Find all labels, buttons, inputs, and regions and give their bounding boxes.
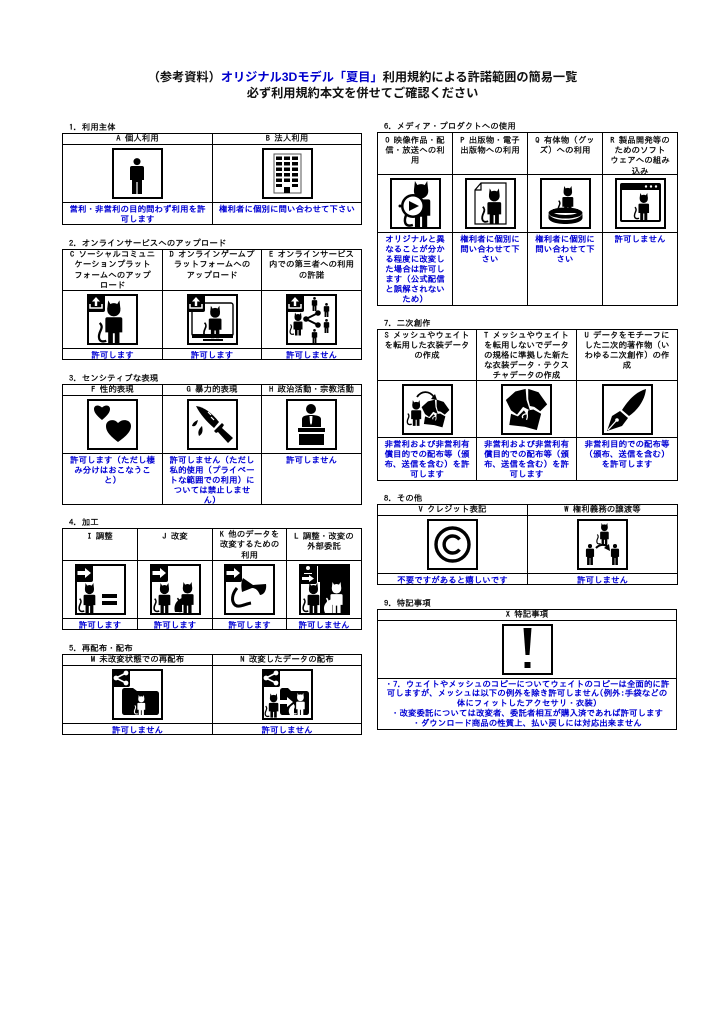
header: S: の作成 <box>414 352 440 360</box>
result: T: 布、送信を含む）を許 <box>484 461 569 469</box>
header: R: ウェアへの組み <box>610 157 670 165</box>
result: O: オリジナルと異 <box>385 236 445 244</box>
result: A: 営利・非営利の目的問わず利用を許 <box>70 206 206 214</box>
header: D: アップロード <box>186 272 238 280</box>
result: S: 償目的での配布等（頒 <box>384 451 470 459</box>
icon: outsource <box>287 561 362 619</box>
table <box>62 654 362 735</box>
result: K <box>213 619 287 630</box>
subtitle: 必ず利用規約本文を併せてご確認ください <box>247 86 478 100</box>
result: G: 私的使用（プライベー <box>170 467 254 475</box>
result: Q: 問い合わせて下 <box>535 246 595 254</box>
result: M <box>63 724 213 735</box>
header: T: の規格に準拠した新た <box>484 352 569 360</box>
result: O <box>378 233 453 306</box>
header: D: ラットフォームへの <box>174 261 250 269</box>
header: A: A 個人利用 <box>116 135 159 143</box>
result: P: さい <box>482 256 498 264</box>
heading: 1. 利用主体 <box>69 124 116 132</box>
header: Q <box>528 133 603 175</box>
header: Q: ズ）への利用 <box>540 147 590 155</box>
result: P: 権利者に個別に <box>460 236 520 244</box>
panel: 7. 二次創作 <box>377 318 678 481</box>
header: S: を転用した衣装データ <box>384 342 470 350</box>
result: B: 権利者に個別に問い合わせて下さい <box>219 206 355 214</box>
panel: 6. メディア・プロダクトへの使用 <box>377 122 678 306</box>
header: N <box>213 655 362 666</box>
heading: 6. メディア・プロダクトへの使用 <box>384 123 516 131</box>
result: F: み分けはおこなうこ <box>74 467 151 475</box>
result: O: ため） <box>402 296 428 304</box>
result: H <box>262 454 362 505</box>
header: C: ロード <box>100 282 125 290</box>
result: L: 許可しません <box>298 622 350 630</box>
header: L: 外部委託 <box>307 543 341 551</box>
header: M: M 未改変状態での再配布 <box>91 656 184 664</box>
panel: 8. その他 <box>377 494 678 585</box>
header: I <box>63 529 138 561</box>
icon: redistribute <box>63 666 213 724</box>
header: N: N 改変したデータの配布 <box>240 656 334 664</box>
header: O: 用 <box>411 157 419 165</box>
header: E: E オンラインサービス <box>269 251 354 259</box>
result: G: ん） <box>204 497 220 505</box>
result: F: 許可します（ただし棲 <box>70 456 155 464</box>
table <box>62 133 362 225</box>
result: I: 許可します <box>79 622 121 630</box>
icon: distribute modified <box>213 666 362 724</box>
result: W <box>528 574 678 585</box>
result: U: を許可します <box>602 461 652 469</box>
icon: knife <box>163 396 262 454</box>
table <box>62 249 362 360</box>
result: O: と誤解されない <box>385 286 445 294</box>
icon: pen nib <box>577 381 678 438</box>
header: E: の許諾 <box>299 272 324 280</box>
header: S: S メッシュやウェイト <box>384 332 470 340</box>
result: G: トな範囲での利用）に <box>170 477 254 485</box>
heading: 4. 加工 <box>69 518 99 526</box>
header: W: W 権利義務の譲渡等 <box>564 506 641 514</box>
table <box>377 329 678 481</box>
result: E: 許可しません <box>286 352 337 360</box>
header: U: U データをモチーフに <box>584 332 670 340</box>
icon: person <box>63 145 213 203</box>
result: T: 非営利および非営利有 <box>484 440 569 448</box>
icon: physical goods <box>528 175 603 233</box>
heading: 7. 二次創作 <box>384 320 431 328</box>
header: F: F 性的表現 <box>91 386 134 394</box>
header: K: 改変するための <box>220 541 279 549</box>
header: I: I 調整 <box>87 533 113 541</box>
header: T: を転用しないでデータ <box>484 342 569 350</box>
header: X: X 特記事項 <box>506 611 548 619</box>
result: C: 許可します <box>91 352 134 360</box>
header: B: B 法人利用 <box>266 135 308 143</box>
result: M: 許可しません <box>112 726 163 734</box>
header: V: V クレジット表記 <box>418 506 486 514</box>
header: R <box>603 133 678 175</box>
icon: speaker at podium <box>262 396 362 454</box>
header: T: T メッシュやウェイト <box>484 332 569 340</box>
header: U: 成 <box>623 362 631 370</box>
result: I <box>63 619 138 630</box>
header: G: G 暴力的表現 <box>186 386 238 394</box>
header: D: D オンラインゲームプ <box>170 251 254 259</box>
result: J <box>138 619 213 630</box>
result: notes: 体にフィットしたアクセサリ・衣装) <box>457 700 597 708</box>
header: O <box>378 133 453 175</box>
result: N: 許可しません <box>262 726 312 734</box>
header: U: した二次的著作物（い <box>584 342 670 350</box>
icon: third-party licensing <box>262 291 362 349</box>
panel: 5. 再配布・配布 <box>62 644 362 735</box>
result: O: た場合は許可し <box>385 266 445 274</box>
result: H: 許可しません <box>286 456 337 464</box>
header: L <box>287 529 362 561</box>
header: R: 込み <box>632 168 648 176</box>
result: U: （頒布、送信を含む） <box>584 451 670 459</box>
header: O: O 映像作品・配 <box>385 136 445 144</box>
result: S: 可します <box>410 471 444 479</box>
panel: 2. オンラインサービスへのアップロード <box>62 238 362 360</box>
result: N <box>213 724 362 735</box>
header: K <box>213 529 287 561</box>
icon: bow and tail parts <box>213 561 287 619</box>
icon: adjust <box>63 561 138 619</box>
result: U: 非営利目的での配布等 <box>584 440 670 448</box>
table <box>62 528 362 630</box>
result: J: 許可します <box>154 622 196 630</box>
result: F <box>63 454 163 505</box>
result: U <box>577 438 678 481</box>
result: G <box>163 454 262 505</box>
header: J: J 改変 <box>162 533 188 541</box>
result: A: 可します <box>120 216 154 224</box>
result: D: 許可します <box>191 352 233 360</box>
icon: rights transfer <box>528 516 678 574</box>
table <box>62 384 362 505</box>
header: S <box>378 330 477 381</box>
header: R: ためのソフト <box>614 147 666 155</box>
panel: 9. 特記事項 <box>377 598 677 730</box>
header: T <box>477 330 577 381</box>
header: O: 信・放送への利 <box>385 147 445 155</box>
result: S: 布、送信を含む）を許 <box>384 461 470 469</box>
result: G: 許可しません（ただし <box>170 456 254 464</box>
header: U: わゆる二次創作）の作 <box>584 352 670 360</box>
icon: copyright <box>378 516 528 574</box>
header: C: ケーションプラット <box>74 261 151 269</box>
result: R <box>603 233 678 306</box>
result: K: 許可します <box>228 622 271 630</box>
header: J <box>138 529 213 561</box>
header: P: 出版物への利用 <box>460 147 520 155</box>
icon: clothing <box>477 381 577 438</box>
header: L: L 調整・改変の <box>294 533 354 541</box>
result: E <box>262 349 362 360</box>
result: P <box>453 233 528 306</box>
result: C <box>63 349 163 360</box>
result: O: なることが分か <box>385 246 445 254</box>
result: B <box>213 203 362 225</box>
header: P <box>453 133 528 175</box>
header: T: な衣装データ・テクス <box>484 362 569 370</box>
title: （参考資料）オリジナル3Dモデル「夏目」利用規約による許諾範囲の簡易一覧 <box>148 70 577 84</box>
header: X <box>378 610 677 621</box>
header: W <box>528 505 678 516</box>
heading: 2. オンラインサービスへのアップロード <box>69 240 226 248</box>
icon: exclamation <box>378 621 677 679</box>
header: K: K 他のデータを <box>220 531 279 539</box>
icon: cat to clothing <box>378 381 477 438</box>
result: notes: 可しますが、メッシュは以下の例外を除き許可しません(例外:手袋などの <box>387 690 667 698</box>
result: Q: さい <box>556 256 574 264</box>
result: O: る程度に改変し <box>385 256 445 264</box>
result: notes: ・7. ウェイトやメッシュのコピーについてウェイトのコピーは全面的に許 <box>385 680 669 688</box>
result: O: ます（公式配信 <box>385 276 445 284</box>
header: C <box>63 250 163 291</box>
icon: upload avatar <box>63 291 163 349</box>
header: M <box>63 655 213 666</box>
result: V <box>378 574 528 585</box>
result: A <box>63 203 213 225</box>
result: G: ついては禁止しませ <box>174 487 250 495</box>
header: A <box>63 134 213 145</box>
panel: 4. 加工 <box>62 518 362 630</box>
result: T <box>477 438 577 481</box>
result: notes <box>378 679 677 730</box>
result: Q: 権利者に個別に <box>535 236 595 244</box>
result: F: と） <box>104 477 121 485</box>
header: T: チャデータの作成 <box>492 372 560 380</box>
header: D <box>163 250 262 291</box>
icon: hearts <box>63 396 163 454</box>
header: E: 内での第三者への利用 <box>269 261 354 269</box>
result: L <box>287 619 362 630</box>
header: C: C ソーシャルコミュニ <box>70 251 155 259</box>
table <box>377 504 678 585</box>
icon: video <box>378 175 453 233</box>
table <box>377 132 678 306</box>
header: G <box>163 385 262 396</box>
result: D <box>163 349 262 360</box>
icon: publication <box>453 175 528 233</box>
icon: building <box>213 145 362 203</box>
heading: 5. 再配布・配布 <box>69 644 133 652</box>
header: V <box>378 505 528 516</box>
header: Q: Q 有体物（グッ <box>535 136 595 144</box>
header: P: P 出版物・電子 <box>460 136 520 144</box>
icon: software window <box>603 175 678 233</box>
header: H: H 政治活動・宗教活動 <box>269 386 354 394</box>
heading: 8. その他 <box>384 494 422 502</box>
result: T: 可します <box>510 471 544 479</box>
result: notes: ・改変委託については改変者、委託者相互が購入済であれば許可します <box>391 710 663 718</box>
heading: 3. センシティブな表現 <box>69 374 158 382</box>
header: C: フォームへのアップ <box>74 272 151 280</box>
header: B <box>213 134 362 145</box>
result: S: 非営利および非営利有 <box>384 440 470 448</box>
result: notes: ・ダウンロード商品の性質上、払い戻しには対応出来ません <box>412 720 642 728</box>
result: S <box>378 438 477 481</box>
panel: 1. 利用主体 <box>62 122 362 225</box>
header: F <box>63 385 163 396</box>
result: W: 許可しません <box>577 576 628 584</box>
header: E <box>262 250 362 291</box>
panel: 3. センシティブな表現 <box>62 374 362 505</box>
header: R: R 製品開発等の <box>610 136 670 144</box>
icon: modify <box>138 561 213 619</box>
icon: game platform <box>163 291 262 349</box>
header: H <box>262 385 362 396</box>
result: T: 償目的での配布等（頒 <box>484 451 569 459</box>
header: U <box>577 330 678 381</box>
result: P: 問い合わせて下 <box>460 246 520 254</box>
result: Q <box>528 233 603 306</box>
heading: 9. 特記事項 <box>384 600 431 608</box>
table <box>377 609 677 730</box>
result: V: 不要ですがあると嬉しいです <box>397 576 508 584</box>
header: K: 利用 <box>241 552 258 560</box>
result: R: 許可しません <box>614 236 666 244</box>
